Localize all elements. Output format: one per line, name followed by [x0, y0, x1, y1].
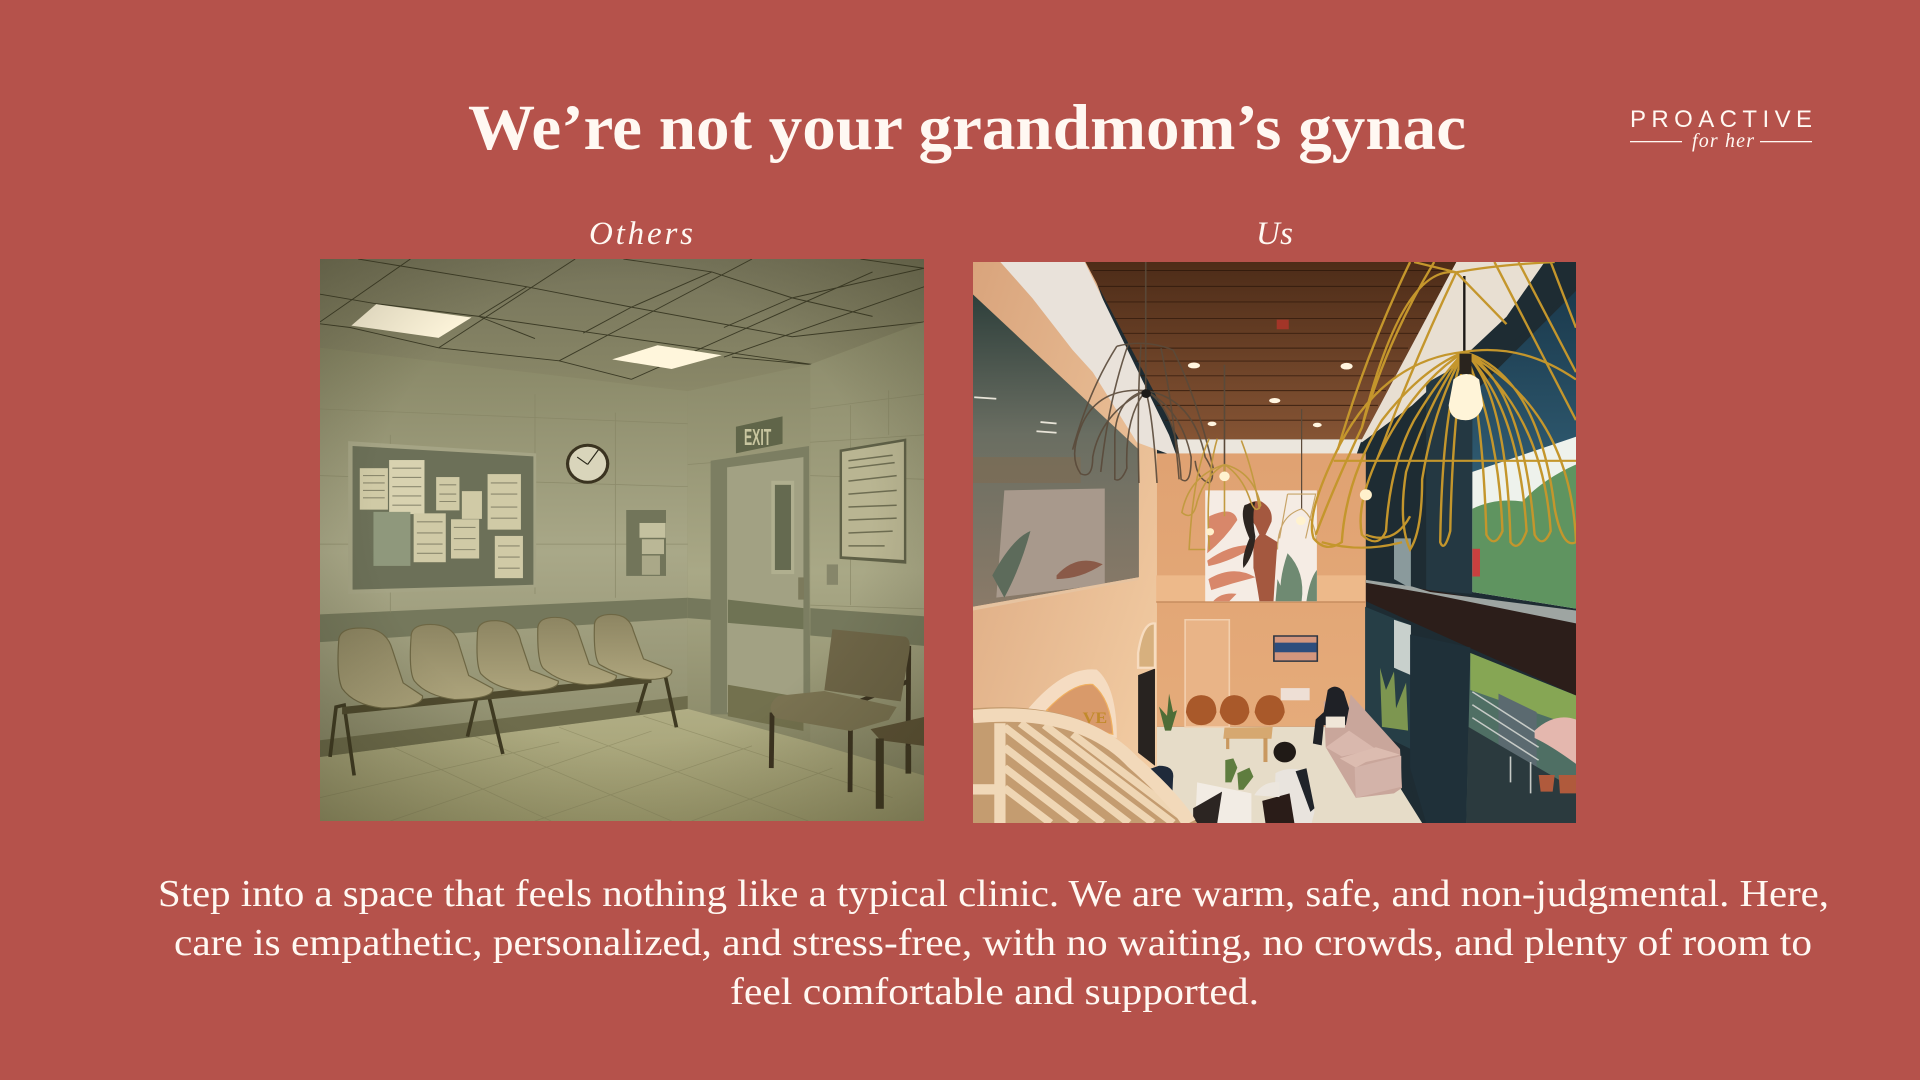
- right white duct: [1358, 262, 1545, 442]
- photo: warm modern clinic lobby: [973, 262, 1576, 823]
- lamp bulb: [1449, 354, 1483, 420]
- coffee table: [1223, 727, 1273, 762]
- woman in white cap: [1254, 782, 1294, 823]
- upper right window: [1394, 291, 1576, 609]
- light switch: [827, 564, 838, 585]
- right walls: [688, 322, 924, 775]
- side table: [871, 717, 924, 809]
- description paragraph: care is empathetic, personalized, and stress-free, with no waiting, no crowds, and plenty of room to: [174, 922, 1812, 964]
- illuminated sign arch: VE: [1083, 709, 1107, 727]
- vignette: [320, 259, 924, 821]
- back wall: [1156, 453, 1366, 727]
- pink sofa: [1324, 694, 1402, 798]
- wall tv: [1273, 635, 1318, 662]
- row of plastic chairs: [330, 614, 676, 775]
- exit sign: [736, 416, 783, 453]
- left glass window: [973, 295, 1139, 610]
- wall band: [320, 598, 924, 646]
- arch niche: [1138, 623, 1155, 668]
- description paragraph: [158, 873, 1829, 1013]
- door: [711, 446, 810, 731]
- ceiling lights: [351, 304, 722, 369]
- left wall: [973, 262, 1157, 823]
- reception desk and laptop: [1193, 758, 1253, 823]
- description paragraph: Step into a space that feels nothing like a typical clinic. We are warm, safe, and non-judgmental. Here,: [158, 873, 1829, 915]
- wall clock: [566, 444, 609, 484]
- left wall: [320, 348, 688, 757]
- illuminated sign arch: [1028, 669, 1117, 738]
- shelf with bottles: [1281, 688, 1310, 700]
- wire pendant lamp: centre: [1182, 365, 1261, 550]
- brochure holder: [626, 510, 666, 576]
- label: Us: Us: [1256, 216, 1293, 252]
- potted plant: [1159, 694, 1177, 731]
- white bulkhead: [1177, 439, 1362, 456]
- ceiling: [320, 259, 924, 391]
- logo: Proactive for her: [1630, 106, 1812, 152]
- seated woman: [1313, 687, 1349, 745]
- man with backpack: [1273, 742, 1314, 823]
- floor: [320, 696, 924, 821]
- wire pendant lamp: left, dark: [1073, 262, 1213, 483]
- wooden stair railing: [973, 707, 1197, 823]
- description paragraph: feel comfortable and supported.: [730, 971, 1259, 1013]
- framed notice: [840, 439, 906, 564]
- bulletin board: [348, 441, 536, 594]
- right dark structure: [1366, 287, 1576, 823]
- label: Others: Others: [589, 216, 693, 252]
- wood ceiling: [1085, 262, 1456, 439]
- wire pendant lamp: back right: [1278, 409, 1317, 550]
- lobby floor: [1157, 727, 1422, 823]
- exit sign: EXIT: [744, 425, 771, 451]
- large gold wire pendant lamp: [1312, 262, 1576, 550]
- logo: Proactive for her: for her: [1692, 130, 1754, 152]
- wall mural: [1205, 490, 1317, 601]
- tan armchairs: [1186, 695, 1285, 725]
- title: We’re not your grandmom’s gynac: [468, 92, 1466, 164]
- tv screen on left wall: [1138, 669, 1155, 766]
- receptionist: [1133, 766, 1173, 823]
- lower right balcony view: [1466, 653, 1576, 823]
- wall block lines: [320, 390, 924, 613]
- lobby door: [1185, 620, 1229, 727]
- logo: Proactive for her: PROACTIVE: [1630, 106, 1812, 133]
- photo: dated clinic waiting room: [320, 259, 924, 821]
- white duct: [1000, 262, 1177, 457]
- lower glass and pillars: [1365, 607, 1470, 823]
- dark beam: [1366, 580, 1576, 696]
- armchair: [771, 629, 910, 792]
